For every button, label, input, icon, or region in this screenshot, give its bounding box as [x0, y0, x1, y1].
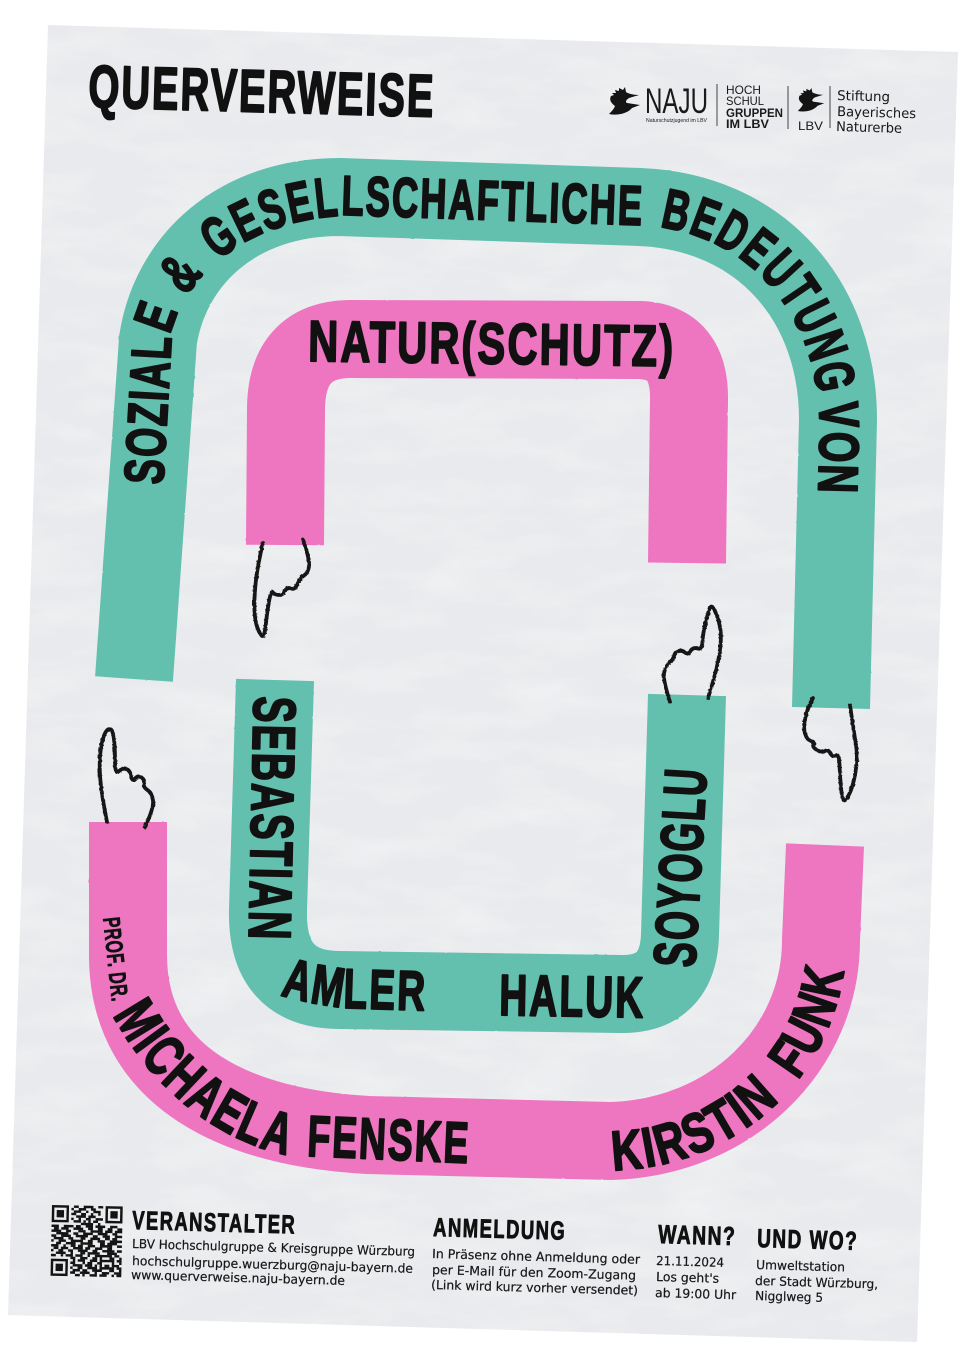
topic text on teal ribbon: BEDEUTUNG	[661, 188, 855, 391]
logo: NAJU bird	[609, 87, 640, 115]
footer: Veranstalter	[131, 1205, 415, 1288]
speaker name: Soyoglu: SOYOGLU	[641, 765, 720, 969]
topic text on teal ribbon: &	[161, 257, 204, 292]
speaker name: Kirstin Funk	[612, 964, 845, 1172]
logo: Hochschulgruppen: IM LBV	[726, 117, 769, 131]
text: registration: per E-Mail für den Zoom-Zugang	[432, 1262, 636, 1283]
logo: NAJU wordmark: NAJU	[645, 82, 708, 121]
speaker name: Michaela Fenske: MICHAELA	[113, 996, 288, 1156]
speaker name: Sebastian: SEBASTIAN	[236, 696, 308, 942]
topic text on teal ribbon	[124, 175, 860, 492]
ribbon: pink top inner	[285, 339, 689, 563]
icon: pointing hand, teal inner up	[664, 606, 721, 702]
logo: Stiftung Bayerisches Naturerbe: Stiftung	[837, 88, 890, 105]
text: registration	[431, 1246, 641, 1298]
icon: pointing hand, pink up	[100, 729, 153, 827]
logo: Hochschulgruppen: SCHUL	[726, 94, 764, 108]
logos	[609, 82, 916, 137]
title: QUERVERWEISE	[88, 53, 436, 130]
QR code	[51, 1205, 123, 1277]
ribbon: pink bottom	[128, 822, 825, 1141]
text: registration: (Link wird kurz vorher versendet)	[431, 1277, 638, 1298]
text: organiser: LBV Hochschulgruppe & Kreisgruppe Würzburg	[132, 1236, 415, 1259]
topic text on pink ribbon: NATUR(SCHUTZ)	[308, 309, 676, 379]
speaker name: Kirstin Funk: FUNK	[766, 964, 845, 1079]
text: location	[755, 1257, 878, 1305]
speaker name: Amler: AMLER	[280, 959, 424, 1012]
topic text on teal ribbon: GESELLSCHAFTLICHE	[201, 175, 642, 256]
footer: Wann	[655, 1219, 737, 1302]
logo: LBV wordmark: LBV	[798, 119, 823, 133]
logo: Hochschulgruppen	[726, 83, 783, 131]
heading: Veranstalter: VERANSTALTER	[132, 1205, 297, 1240]
logo: Hochschulgruppen: GRUPPEN	[726, 106, 783, 120]
text: date and time: ab 19:00 Uhr	[655, 1285, 737, 1302]
text: email: hochschulgruppe.wuerzburg@naju-bayern.de	[132, 1253, 414, 1276]
logo: Stiftung Bayerisches Naturerbe: Naturerbe	[836, 119, 902, 137]
footer: Anmeldung	[431, 1212, 641, 1298]
text: date and time	[655, 1253, 737, 1302]
text: registration: In Präsenz ohne Anmeldung oder	[432, 1246, 641, 1267]
ribbon: teal outer	[134, 197, 838, 708]
icon: pointing hand, teal outer down	[804, 698, 857, 800]
speaker name: Michaela Fenske: FENSKE	[308, 1115, 468, 1164]
logo: Stiftung Bayerisches Naturerbe	[836, 88, 916, 137]
ribbon: teal inner	[268, 680, 687, 994]
text: date and time: Los geht's	[656, 1269, 719, 1286]
footer: Und wo	[755, 1223, 878, 1305]
logo: Stiftung Bayerisches Naturerbe: Bayerisches	[837, 104, 916, 122]
heading: Anmeldung: ANMELDUNG	[433, 1212, 567, 1246]
logo: NAJU tagline: Naturschutzjugend im LBV	[646, 118, 708, 124]
icon: pointing hand, pink to teal	[254, 540, 309, 636]
speaker name: Michaela Fenske	[113, 996, 468, 1164]
heading: Wann: WANN?	[658, 1219, 737, 1251]
logo: Hochschulgruppen: HOCH	[726, 83, 761, 97]
speaker name: Kirstin Funk: KIRSTIN	[612, 1072, 778, 1172]
text: website: www.querverweise.naju-bayern.de	[131, 1267, 346, 1288]
text: location: der Stadt Würzburg,	[755, 1273, 878, 1291]
text: location: Nigglweg 5	[755, 1288, 823, 1305]
logo: LBV bird	[798, 88, 824, 111]
text: date and time: 21.11.2024	[656, 1253, 724, 1270]
text: location: Umweltstation	[756, 1257, 845, 1274]
heading: Und wo: UND WO?	[757, 1223, 859, 1256]
speaker name: Haluk: HALUK	[499, 963, 646, 1031]
speaker title: Prof. Dr.: PROF. DR.	[97, 916, 133, 1003]
topic text on teal ribbon: VON	[818, 400, 860, 492]
topic text on teal ribbon: SOZIALE	[124, 300, 178, 484]
